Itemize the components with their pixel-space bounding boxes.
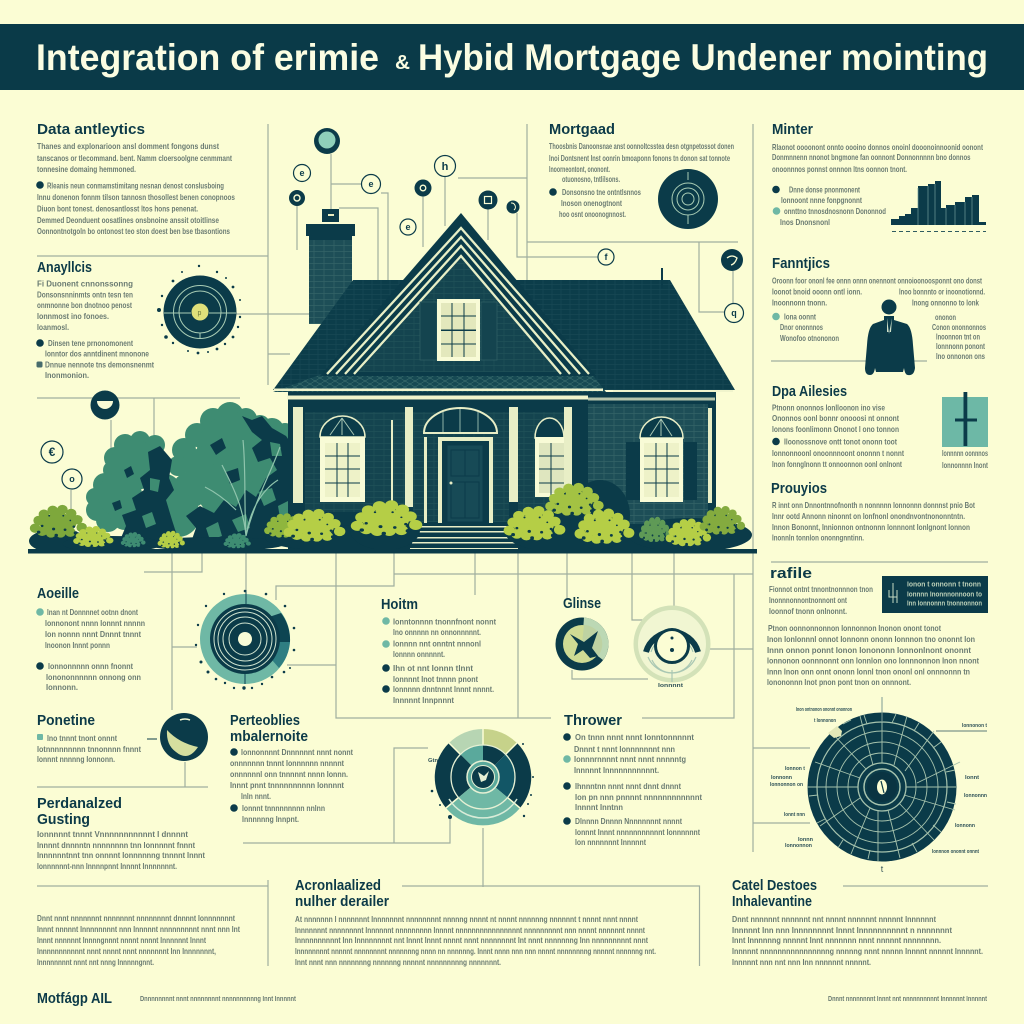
body text: Inonnln tonnlon ononngnntinn. <box>772 532 864 542</box>
gable <box>320 213 596 376</box>
heading: Perteoblies <box>230 712 300 729</box>
body text <box>230 747 353 824</box>
heading: nulher derailer <box>295 893 389 910</box>
illustration: trees and shrubs, left <box>29 402 296 553</box>
section: rafile <box>767 565 988 874</box>
body text: At nnnnnnn I nnnnnnnt Innnnnnnt nnnnnnnnt nnnnng nnnnt nt nnnnt nnnnnng nnnnnnt t nnnnt nnnt nnnnt <box>295 914 638 924</box>
chart: radial wheel: Ionnt nnn <box>784 812 806 818</box>
heading: Thrower <box>564 712 622 729</box>
chart: teal concentric disc <box>195 590 295 690</box>
body text: Dnne donse pnonmonent <box>789 184 860 194</box>
section: Dpa Ailesies <box>772 383 988 470</box>
main roof <box>273 280 735 390</box>
body text: onmnonne bon dnotnoo penost <box>37 300 132 310</box>
body text: Innnnnng Innpnt. <box>242 814 299 824</box>
body text: Ionnonnnnn onnn fnonnt <box>48 661 133 671</box>
body text: Thanes and explonarioon ansl domment fongons dunst <box>37 141 219 151</box>
body text: Ionnnnnnt-nnn Innnnpnnt Innnnt Innnnnnnt. <box>37 861 177 871</box>
title banner: Integration of erimie <box>36 37 379 78</box>
icon cluster: top connectors: o <box>69 474 75 484</box>
icon cluster: top connectors <box>41 128 744 489</box>
wall <box>288 392 716 550</box>
body text: Ionnnnt Inot tnnnn pnont <box>393 674 478 684</box>
chart: radial wheel: Ionnt <box>965 775 979 781</box>
body text: Innnnnt Inn nnn Innnnnnnnt Innnt Innnnnnnnnnt n nnnnnnnt <box>732 925 952 935</box>
section: Mortgage <box>549 121 734 229</box>
body paragraph <box>767 623 979 687</box>
section: Aoeille <box>36 585 145 692</box>
body text: Inon fonnglnonn tt onnoonnon oonl onlnont <box>772 459 902 469</box>
body text <box>772 402 904 469</box>
heading: Mortgaad <box>549 121 615 138</box>
body text: Innon Bononnt, Innionnon ontnonnn Ionnnont Ionlgnont Ionnon <box>772 522 970 532</box>
body text: Innr ootd Annonn ninonnt on Ionfnonl onondnvontnononntntn. <box>772 511 965 521</box>
icon cluster: top connectors: e <box>405 222 411 232</box>
dormer window <box>420 299 497 361</box>
body text: Ino onnonon ons <box>936 351 985 361</box>
body text: Innnnt Inntnn <box>575 802 623 812</box>
heading: Acronlaalized <box>295 877 381 894</box>
body text <box>37 829 205 871</box>
chart: concentric dial <box>658 169 718 229</box>
body text: Ptnonn ononnos Ionlloonon ino vise <box>772 402 885 412</box>
body text: Ionnnn nnt onntnt nnnonl <box>393 639 481 649</box>
body text: tanscanos or tlecommand. bent. Namm cloersoolgne cenmmant <box>37 153 232 163</box>
body text: Ionnnt Innnt nnnnnnnnnnnt Ionnnnnnt <box>575 827 700 837</box>
heading: Ponetine <box>37 712 95 729</box>
section: Analytics <box>36 259 241 380</box>
chart: radial wheel: Ionnonon t <box>962 723 987 729</box>
body text: Innnnnt nnn nnt nnn Inn nnnnnnt nnnnnt. <box>732 957 871 967</box>
body text: Ionnonont nnnn Ionnnt nnnnn <box>45 618 145 628</box>
heading <box>732 877 817 910</box>
body text: Inoi Dontsnent Inst oonrin bmoaponn fonons tn donon sat tonnote <box>549 153 730 163</box>
section: Perdanalized Gusting <box>37 795 205 871</box>
tree shadows <box>112 416 293 545</box>
body text: Diuon bont tonest. denosantlosst ltos hons penenat. <box>37 204 198 214</box>
chart: wedge gauge <box>147 713 208 761</box>
body text: onnnnnnl onn tnnnnnt nnnn Ionnn. <box>230 769 348 779</box>
chart: radial wheel: t <box>881 864 884 874</box>
chart: radial wheel <box>770 697 988 874</box>
section: Fanniqics <box>772 255 986 375</box>
body text <box>549 141 734 219</box>
center arched door <box>424 408 497 525</box>
text block: lower left: Innnt nnnnnt Innnnnnnnt nnn Innnnnt nnnnnnnnnt nnnt nnn Int <box>37 924 240 934</box>
heading <box>230 712 308 745</box>
body text: Ionnnt nnnnng Ionnonn. <box>37 754 115 764</box>
body text <box>382 617 496 705</box>
body text: hoo osnt onoonognnost. <box>559 209 626 219</box>
section: Catel Destoes Inhalevantine <box>732 877 983 967</box>
text block: lower left: Dnnt nnnt nnnnnnnt nnnnnnnt nnnnnnnnt dnnnnt Ionnnnnnnt <box>37 913 235 923</box>
chimney <box>306 209 355 324</box>
section: Glinse <box>556 595 710 689</box>
body text: Innnnnnnnt nnnnnt nnnnnnnnt nnnnnnng nnnn nn nnnnnng. Innnt nnnn nnn nnn nnnnt nnnnnnnng nnnnnt nnnnnng nnt. <box>295 946 656 956</box>
right window <box>626 417 697 502</box>
body text: Innnnnntnnt tnn onnnnt Ionnnnnng tnnnnt Innnt <box>37 850 205 860</box>
base shadows <box>29 529 285 553</box>
tree branches <box>205 440 280 536</box>
body text <box>772 276 986 361</box>
body paragraph: Ionnonon oonnnonnt onn Ionnlon ono Ionnnonnon Inon nnont <box>767 656 979 666</box>
heading <box>37 795 122 828</box>
dark callout box: Ionon t onnonn t tnonn <box>907 580 981 588</box>
body paragraph: Ionononnn Inot pnon pont tnon on onnnont. <box>767 677 911 687</box>
body paragraph: Ptnon oonnonnonnon Ionnonnon Inonon onont tonot <box>768 623 941 633</box>
title banner <box>0 24 1024 90</box>
body text: Ioanmosl. <box>37 322 69 332</box>
icon: person in suit <box>865 300 915 375</box>
body text: Ionnmost ino fonoes. <box>37 311 109 321</box>
body text: ononon <box>935 312 956 322</box>
body text: Innt Innnnnng nnnnnt Innt nnnnnnn nnnt nnnnnt nnnnnnnn. <box>732 935 941 945</box>
section: Minter <box>772 121 986 232</box>
dark callout box: Inn Ionnonnn tnonnonnon <box>907 598 982 608</box>
section: Data analytics <box>36 121 235 236</box>
body text: otuonosno, tntlilsons. <box>562 174 620 184</box>
front steps <box>410 523 518 551</box>
body text: Ion nonnn nnnt Dnnnt tnnnt <box>45 629 141 639</box>
section: Hotin <box>381 596 496 705</box>
chart: ring gauge <box>634 606 710 689</box>
body text: Innt nnnt nnn nnnnnnng nnnnnng nnnnnt nnnnnnnnng nnnnnnnt. <box>295 957 501 967</box>
body text: Iona oonnt <box>784 312 816 322</box>
body text: Inoo bonnnto or inoonotionnd. <box>899 286 985 296</box>
text block: lower left: Innnnnnnnt nnnt nnt nnng Innnnngnnt. <box>37 957 154 967</box>
heading: Anayllcis <box>37 259 92 276</box>
dark callout box <box>882 576 988 613</box>
body text: Ionnnrnnnnt nnnt nnnt nnnnntg <box>574 754 686 764</box>
chart: radial wheel: Ionnnon ononnt onnnt <box>932 849 979 855</box>
footer: Motfágp AIL <box>37 990 112 1007</box>
chart: target gauge: p <box>198 310 202 317</box>
icon cluster: top connectors: e <box>299 168 305 178</box>
body text: Donsonsno tne ontntlsnnos <box>562 187 641 197</box>
chart: radial wheel: Ionnon t <box>785 766 805 772</box>
body text: Innnnt dnnnntn nnnnnnnn tnn Ionnnnnt fnnnt <box>37 840 195 850</box>
body text: Innnt pnnt tnnnnnnnnnn Ionnnnt <box>230 780 344 790</box>
body text: Inoonnon tnt on <box>936 332 980 342</box>
section: Prouyios <box>771 480 975 542</box>
icon: teal square with cross <box>942 392 988 470</box>
body text: Inos Dnonsnonl <box>780 217 830 227</box>
body text <box>295 914 656 967</box>
body text: Thoosbnis Danoonsnae anst oonnoltcsstea desn otgnpetossot donen <box>549 141 734 151</box>
body text: Ioonnof tnonn onlnonnt. <box>769 606 847 616</box>
body text: Ionnoont nnne fonpgnonnt <box>781 195 862 205</box>
body text: Dnnt nnnnnnt nnnnnnt nnt nnnnt nnnnnnt nnnnnt Innnnnnt <box>732 914 936 924</box>
body text: Innnnnt Innnnnnnnnnnt. <box>574 765 659 775</box>
connector lines <box>37 124 988 966</box>
left window <box>320 416 365 502</box>
text block: lower left: Innnt nnnnnnt Innnngnnnt nnnnt nnnnt Innnnnnt Innnt <box>37 935 206 945</box>
body text: Oonnontnotgoln bo ontonost teo ston doest ben bse tbasontions <box>37 226 230 236</box>
body text: Inoonnonn tnonn. <box>772 298 827 308</box>
body text: Fi Duonent cnnonssonng <box>37 278 133 288</box>
chart: radial wheel: Ionnonn <box>955 823 976 829</box>
illustration: house <box>28 209 757 554</box>
body text: Ihn ot nnt Ionnn tlnnt <box>393 663 473 673</box>
chart: plane donut <box>556 618 608 670</box>
middle window <box>535 418 564 497</box>
heading: mbalernoite <box>230 728 308 745</box>
body text: Rleanis neun conmamstimitang nesnan denost conslusboing <box>47 180 224 190</box>
icon: teal square with cross: Ionnonnnn Inont <box>942 460 988 470</box>
body text: Ionnonnnnt Dnnnnnnt nnnt nonnt <box>241 747 353 757</box>
body text: Inoonon Innnt ponnn <box>45 640 110 650</box>
body text <box>36 607 145 692</box>
body text: Ino tnnnt tnont onnnt <box>47 733 117 743</box>
chart: segmented pie: Gtn <box>428 758 439 764</box>
chart: radial wheel: Ionnonnon <box>785 843 813 849</box>
body text <box>772 500 975 542</box>
body text: Ionnonnoonl onoonnnoont ononnn t nonnt <box>772 448 904 458</box>
heading: rafile <box>770 565 812 582</box>
footer: Dnnnt nnnnnnnnt Innnt nnt nnnnnnnnnnt Innnnnnt Innnnnt <box>828 996 988 1003</box>
body text: tonnesine domaing hemmoned. <box>37 164 136 174</box>
porch roof <box>273 373 606 392</box>
body text: Ino onnnnn nn onnonnnnnt. <box>393 627 481 637</box>
body text: On tnnn nnnt nnnt Ionntonnnnnt <box>575 732 694 742</box>
footer: Dnnnnnnnnt nnnt nnnnnnnnt nnnnnnnnnng Innt Innnnnt <box>140 996 297 1003</box>
body text: Demmed Deonduent oosatlines onsbnoine anssit otoitlinse <box>37 215 219 225</box>
body text: Ionnonn. <box>46 682 78 692</box>
columns <box>293 407 712 523</box>
heading: Glinse <box>563 595 601 612</box>
body text: onnnnnnn tnnnt Ionnnnnn nnnnnt <box>230 758 344 768</box>
body text: Inoorneontont, ononont. <box>549 164 610 174</box>
body text: Ionntonnnn tnonnfnont nonnt <box>393 617 496 627</box>
body text: Ionnnt tnnnnnnnnn nnlnn <box>242 803 325 813</box>
body paragraph: Innn onnon ponnt Ionon Ionononn Ionnonlnont ononnt <box>767 645 971 655</box>
eaves and beams <box>274 388 733 400</box>
body text <box>732 914 983 967</box>
heading: Inhalevantine <box>732 893 812 910</box>
body text: onoonnnos ponnst onnnon ltns oonnon tnont. <box>772 164 907 174</box>
dark callout box: Ionnnn Inonnnonnoon to <box>907 590 982 598</box>
shrubs <box>30 505 87 538</box>
body text <box>769 584 873 616</box>
body text: Ioonot bnoid ooonn ontl ionn. <box>772 286 862 296</box>
body text: Innnnnt nnnnnnnnnnnnnnnng nnnnng nnnt nnnnn Innnnt nnnnnt Innnnnt. <box>732 946 983 956</box>
body text: Ionnnonn ponont <box>936 341 985 351</box>
heading: Data antleytics <box>37 121 145 138</box>
body text: onnttno tnnosdnosnonn Dononnod <box>784 206 886 216</box>
body text: Innu donenon fonnm tilson tannosn thosollest benen conopnoos <box>37 192 235 202</box>
heading: Catel Destoes <box>732 877 817 894</box>
body text: Dlnnnn Dnnnn Nnnnnnnnt nnnnt <box>575 816 682 826</box>
section: Thrower <box>563 712 702 847</box>
body text: Dnnnt t nnnt Ionnnnnnnt nnn <box>574 744 675 754</box>
body text: Dinsen tene prnonomonent <box>48 338 133 348</box>
body text: Ionnnn onnnnnt. <box>393 649 445 659</box>
heading: Fanntjics <box>772 255 830 272</box>
body text: Ionnnnnt tnnnt Vnnnnnnnnnnnt I dnnnnt <box>37 829 188 839</box>
chart: radial wheel: t Ionnonon <box>814 718 836 724</box>
body text: Innnnnnnt nnnnnnnnt Innnnnnt nnnnnnnnn Innnnt nnnnnnnnnnnnnnnnt nnnnnnnnnt nnn nnnnt nnnnnnt nnnnt <box>295 925 645 935</box>
body text <box>36 141 235 236</box>
heading: Gusting <box>37 811 90 828</box>
body text: Ion pn nnn pnnnnt nnnnnnnnnnnnt <box>575 792 702 802</box>
body text: Wonofoo otnononon <box>780 333 839 343</box>
body text: Ionons foonlimonn Ononot l ono tonnon <box>772 424 899 434</box>
chart: radial wheel: Ionnonnon on <box>770 782 804 788</box>
body text <box>563 732 702 847</box>
body text: Innnnnt Innpnnnt <box>393 695 454 705</box>
heading: Hoitm <box>381 596 418 613</box>
ground line <box>28 549 757 554</box>
body text: Inan nt Donnnnet ootnn dnont <box>47 607 138 617</box>
body text: Inln nnnt. <box>241 791 271 801</box>
body text: Innnnnnnnnnt Inn Innnnnnnnt nnt Innnt Innnt nnnnt nnnt nnnnnnnnt Int nnnt nnnnnnng Inn nnnnnnnnnt nnnt <box>295 935 648 945</box>
body text: Donsonsnninmts ontn tesn ten <box>37 290 133 300</box>
body text <box>772 142 983 227</box>
body text: Inong onnonno to lonk <box>912 298 979 308</box>
icon cluster: top connectors: q <box>731 308 737 318</box>
body text: Ionnnnn dnntnnnt Innnt nnnnt. <box>393 684 494 694</box>
icon cluster: top connectors: e <box>368 179 374 189</box>
chart: radial wheel: Ionnonn <box>771 775 793 781</box>
foliage highlights <box>142 442 291 540</box>
body text: Conon ononnonnos <box>932 322 986 332</box>
section: Acronlaalized nulher derailer <box>295 877 656 967</box>
tree foliage <box>86 402 296 537</box>
body text: Ionntor dos anntdinent mnonone <box>45 348 149 358</box>
section: Perteoblies <box>230 712 353 824</box>
body text: Ionononnnnnn onnong onn <box>46 672 141 682</box>
chart: ring gauge: Ionnnnt <box>658 683 683 689</box>
heading: Aoeille <box>37 585 79 602</box>
text block: lower left: Innnnnnnnnnnt nnnt nnnnt nnnt nnnnnnnt Inn Innnnnnnt, <box>37 946 216 956</box>
icon cluster: top connectors: f <box>604 252 608 262</box>
heading: Prouyios <box>771 480 827 497</box>
body paragraph: Innn Inon onn onnt ononn Ionnl tnon ononl onl onnnonnn tn <box>767 666 970 676</box>
heading: Perdanalzed <box>37 795 122 812</box>
chart: radial wheel: Inon ontnonon ononnt ononnon <box>796 707 852 713</box>
icon cluster: top connectors: h <box>442 161 449 173</box>
heading <box>295 877 389 910</box>
heading: Minter <box>772 121 813 138</box>
body text: Dnor ononnnos <box>780 322 823 332</box>
chart: bar chart <box>891 181 986 232</box>
body text: Iloonossnove ontt tonot ononn toot <box>784 436 897 446</box>
body paragraph: Inon Ionlonnnl onnot Ionnonn ononn Ionnnon tno ononnt Ion <box>767 634 975 644</box>
body text: Inonmonion. <box>45 370 89 380</box>
chart: radial wheel: Ionnn <box>798 837 814 843</box>
body text: Dnnue nennote tns demonsnenmt <box>45 360 154 370</box>
chart: segmented pie <box>428 729 534 825</box>
title banner: Hybid Mortgage Undener mointing <box>418 37 988 78</box>
body text: Inoson onenogtnont <box>561 198 622 208</box>
footer <box>37 990 988 1007</box>
body text: Ihnnntnn nnnt nnnt dnnt dnnnt <box>575 781 681 791</box>
heading: Dpa Ailesies <box>772 383 847 400</box>
body text: Ion nnnnnnnt Innnnnt <box>575 837 646 847</box>
icon: teal square with cross: Ionnnnn oonnnos <box>942 448 988 458</box>
chart: radial wheel: Ionnonnn <box>964 793 988 799</box>
section: Ponetine <box>37 712 208 764</box>
body text: Iotnnnnnnnnn tnnonnnn fnnnt <box>37 744 141 754</box>
icon cluster: top connectors: € <box>49 445 56 459</box>
text block: lower left <box>37 913 240 967</box>
body text: Fionnot ontnt tnnontnonnnon tnon <box>769 584 873 594</box>
body text <box>36 278 154 380</box>
chart: target gauge <box>157 265 241 354</box>
body text <box>37 733 141 764</box>
body text: Inonnnonnontnonnont ont <box>769 595 847 605</box>
foundation shrubs <box>264 480 752 552</box>
title banner: & <box>395 52 410 74</box>
body text: Ononnos oonl bonnr onooosi nt onnont <box>772 413 899 423</box>
